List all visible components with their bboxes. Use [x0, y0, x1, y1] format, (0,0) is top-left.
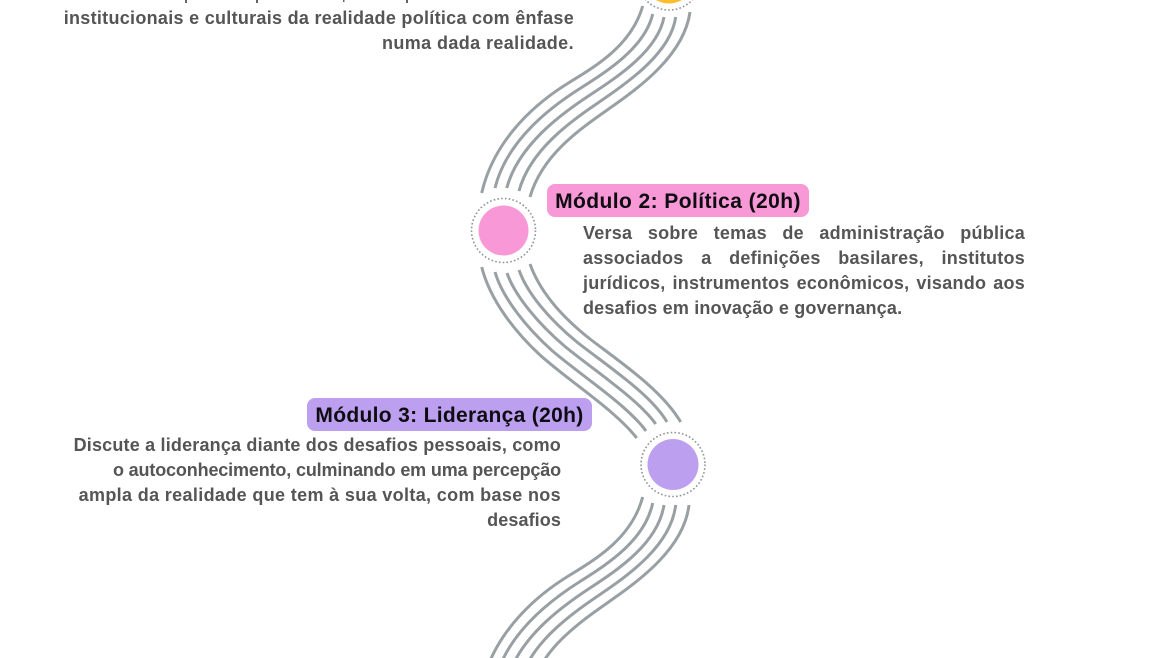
- text block: module 1 description: numa dada realidade.: [382, 33, 574, 53]
- heading: módulo 3: Módulo 3: Liderança (20h): [315, 404, 584, 427]
- text block: module 2 description: associados a definições basilares, institutos: [583, 248, 1025, 268]
- text block: module 2 description: [582, 223, 1025, 318]
- text block: module 2 description: Versa sobre temas de administração pública: [583, 223, 1025, 243]
- text block: module 3 description: [74, 435, 561, 530]
- marker: module 1 yellow circle: [637, 0, 701, 10]
- wavy connector: top marker to module 2: [482, 6, 690, 197]
- heading: módulo 2: Módulo 2: Política (20h): [555, 190, 801, 213]
- text block: module 2 description: desafios em inovação e governança.: [583, 298, 902, 318]
- wavy connector: module 2 to module 3: [482, 264, 681, 438]
- text block: module 3 description: Discute a liderança diante dos desafios pessoais, como: [74, 435, 561, 455]
- marker: module 2 pink circle: [472, 198, 536, 262]
- text block: module 3 description: ampla da realidade que tem à sua volta, com base nos: [79, 485, 561, 505]
- text block: module 1 description: institucionais e culturais da realidade política com ênfase: [64, 8, 574, 28]
- text block: module 1 description: [64, 8, 574, 53]
- text block: module 3 description: desafios: [487, 510, 561, 530]
- heading: módulo 2: [547, 184, 809, 217]
- wavy connector: module 3 downward: [482, 497, 689, 658]
- text block: module 3 description: o autoconhecimento, culminando em uma percepção: [113, 460, 561, 480]
- marker: module 3 purple circle: [641, 432, 705, 496]
- text block: module 2 description: jurídicos, instrumentos econômicos, visando aos: [583, 273, 1025, 293]
- heading: módulo 3: [307, 398, 592, 431]
